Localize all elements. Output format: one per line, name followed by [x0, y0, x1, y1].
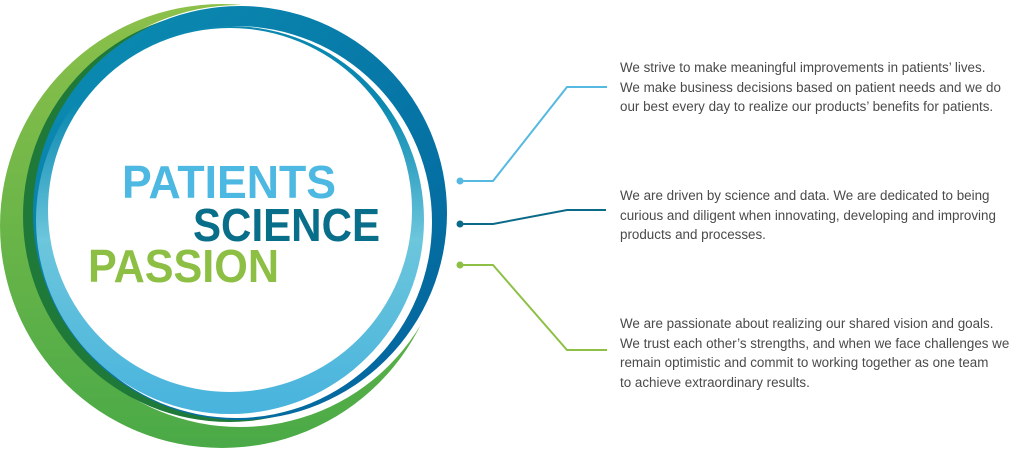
- text: science: curious and diligent when innovating, developing and improving: [620, 208, 996, 222]
- text: patients: our best every day to realize our products’ benefits for patients.: [620, 99, 993, 114]
- text: science: [620, 188, 996, 242]
- word: SCIENCE: SCIENCE: [193, 199, 380, 251]
- word: PASSION: PASSION: [88, 240, 279, 292]
- text: passion: [620, 316, 1009, 390]
- text: passion: remain optimistic and commit to working together as one team: [620, 355, 988, 370]
- ring: green outer: [0, 4, 451, 448]
- text: passion: We are passionate about realizing our shared vision and goals.: [620, 316, 993, 331]
- text: patients: [620, 60, 1001, 114]
- ring: blue: [33, 6, 447, 420]
- connector: patients: [456, 87, 607, 184]
- text: science: products and processes.: [620, 227, 766, 242]
- connector: science: [456, 210, 606, 228]
- text: passion: to achieve extraordinary results.: [620, 374, 810, 390]
- word: PATIENTS: PATIENTS: [122, 156, 336, 208]
- text: patients: We make business decisions based on patient needs and we do: [620, 80, 1001, 94]
- text: science: We are driven by science and data. We are dedicated to being: [620, 188, 989, 203]
- connector: passion: [456, 262, 607, 350]
- text: passion: We trust each other’s strengths, and when we face challenges we: [620, 336, 1009, 350]
- text: patients: We strive to make meaningful improvements in patients’ lives.: [620, 60, 985, 75]
